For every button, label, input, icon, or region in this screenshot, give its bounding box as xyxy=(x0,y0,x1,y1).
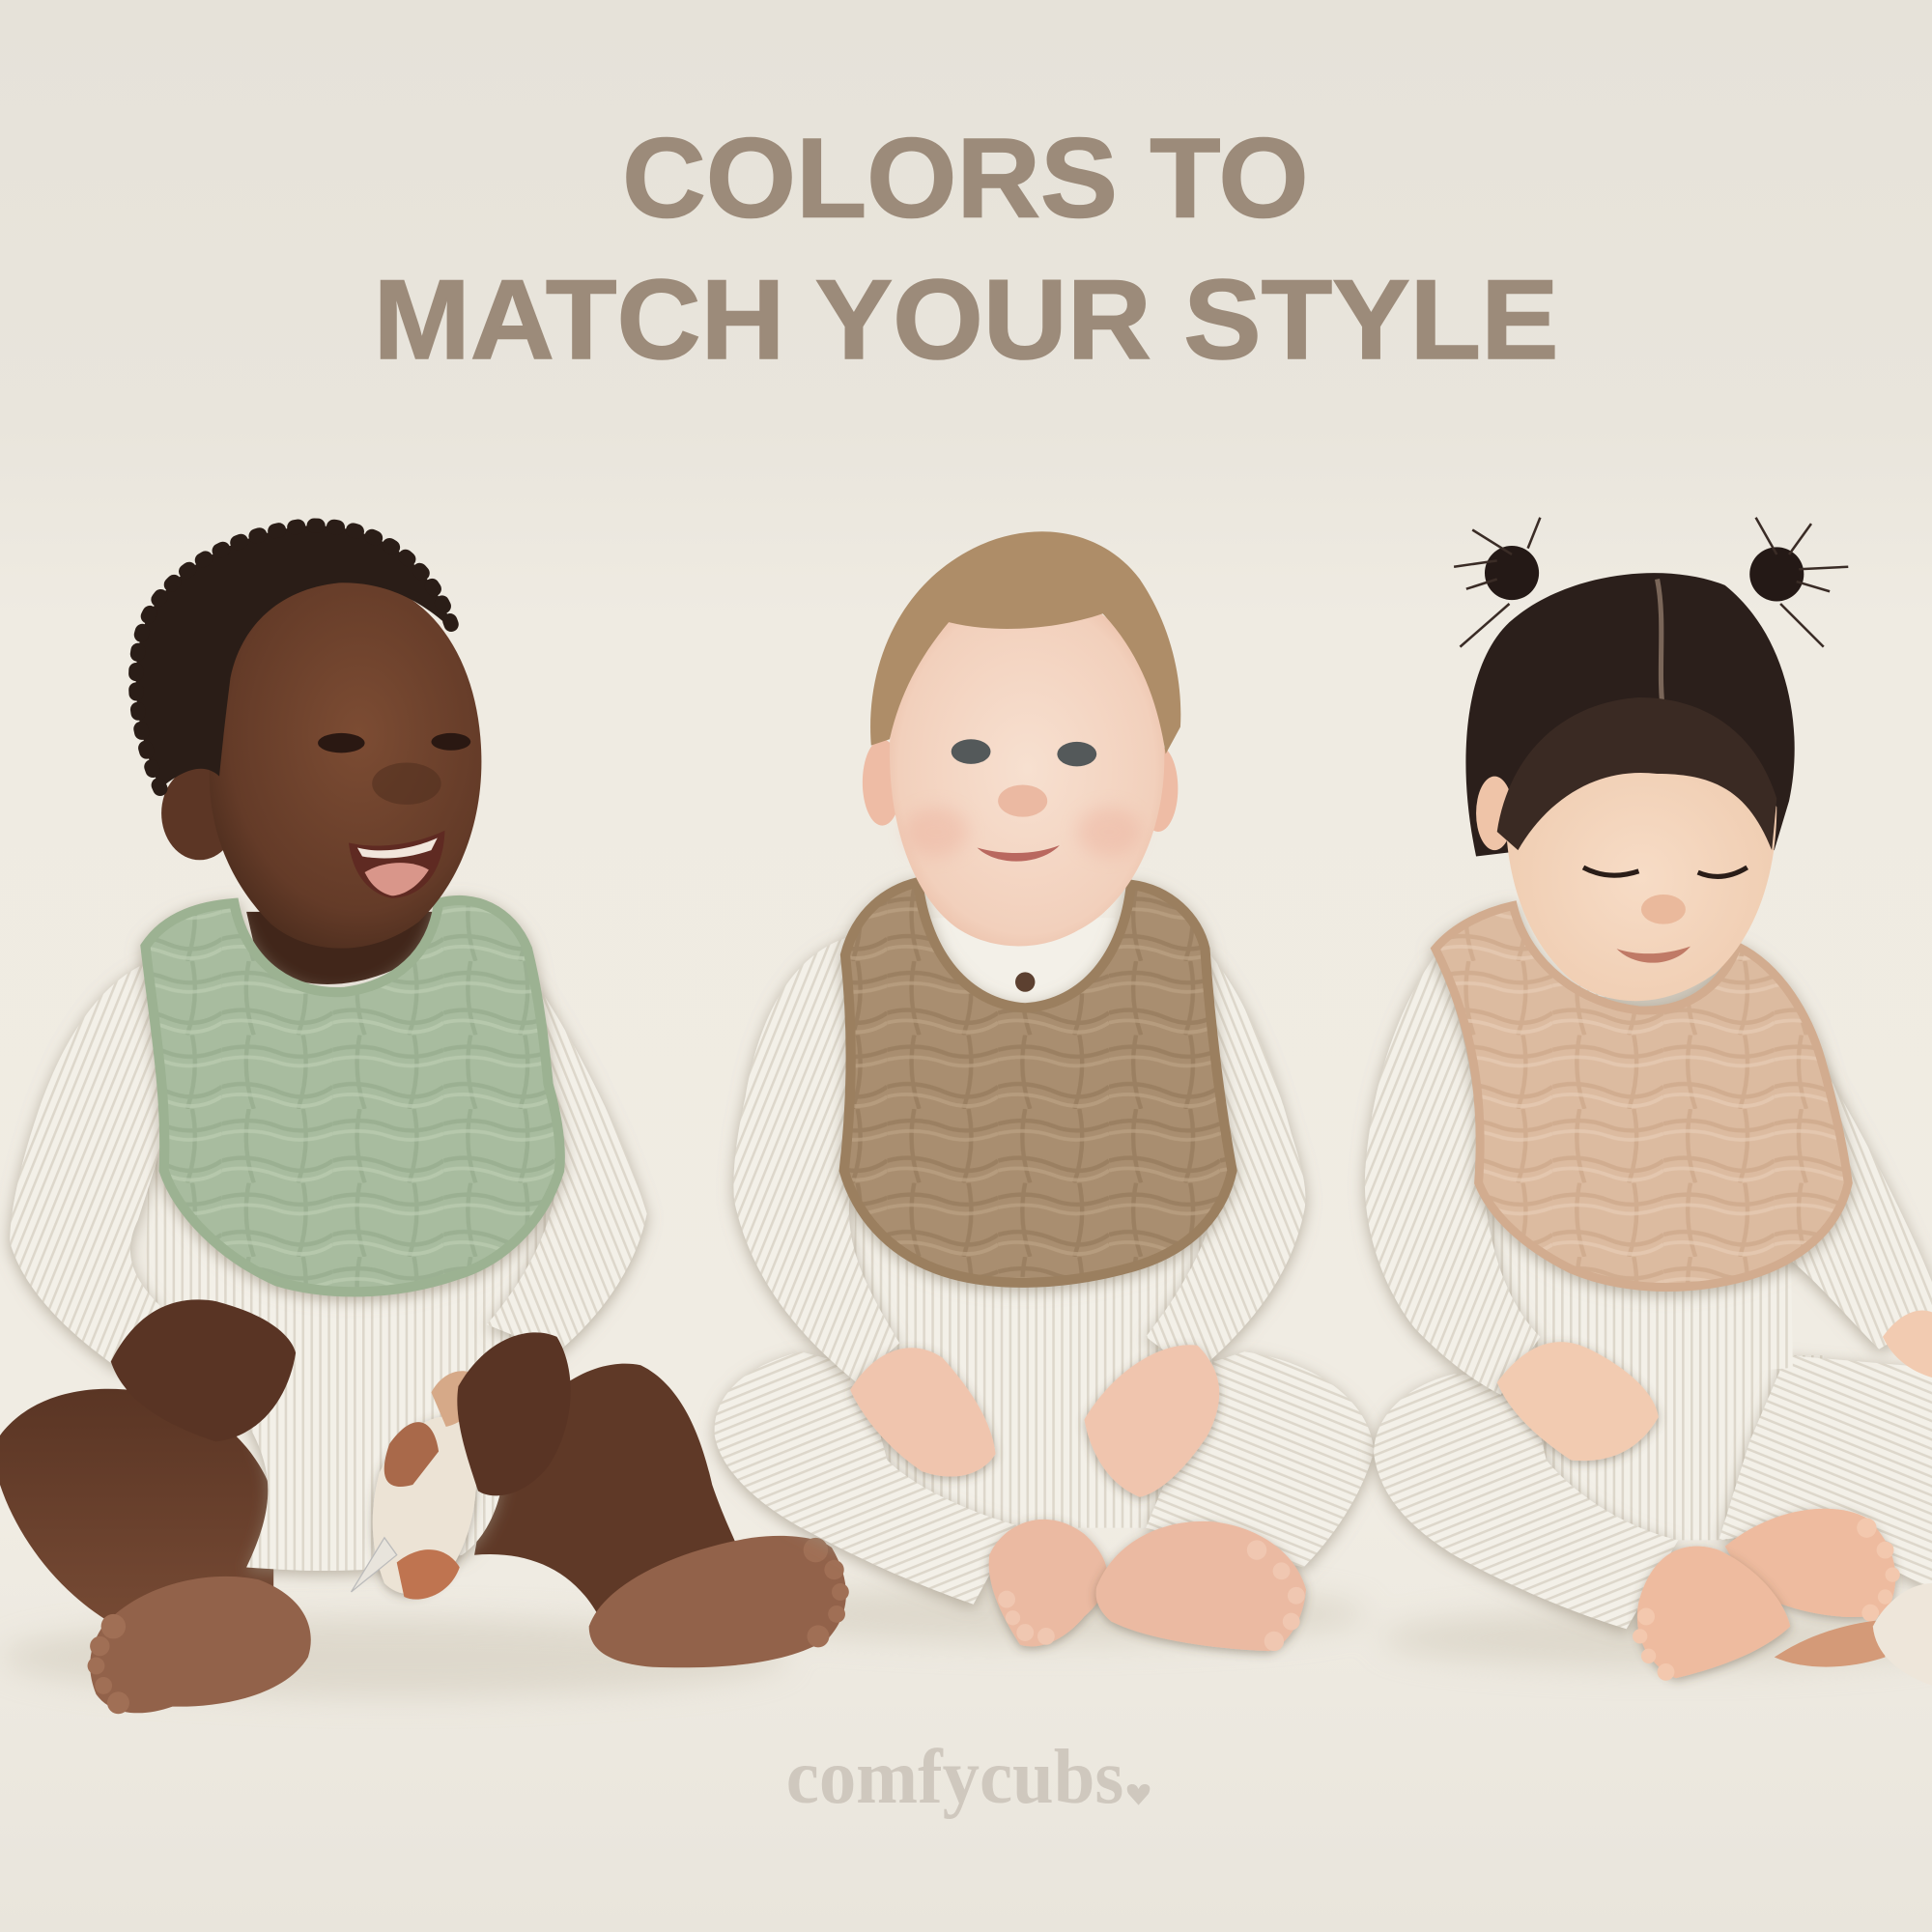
front foot xyxy=(1637,1547,1790,1678)
undershirt collar xyxy=(1528,955,1731,1018)
left foot toes xyxy=(998,1591,1055,1645)
title line 2: MATCH YOUR STYLE xyxy=(373,256,1559,383)
neck and collar xyxy=(930,918,1122,1013)
left ear xyxy=(863,739,902,826)
hair xyxy=(870,531,1180,754)
pelvis xyxy=(850,1355,1208,1528)
left hair bun xyxy=(1485,546,1539,600)
left cheek blush xyxy=(904,807,969,856)
toy wing xyxy=(1775,1620,1886,1667)
shadow under baby 2 xyxy=(727,1584,1368,1644)
back foot xyxy=(1725,1509,1895,1617)
toy rabbit xyxy=(352,1371,484,1600)
baby 1 with green bib xyxy=(0,526,849,1714)
hair parting xyxy=(1658,579,1663,715)
right hand xyxy=(457,1332,571,1495)
green bib xyxy=(146,900,560,1292)
left eye xyxy=(952,739,991,764)
left arm xyxy=(733,936,899,1382)
right cheek blush xyxy=(1077,807,1141,856)
brand logo xyxy=(786,1734,1150,1820)
toy body xyxy=(373,1416,476,1594)
mouth xyxy=(1616,947,1690,963)
left arm xyxy=(10,958,173,1370)
right foot toes xyxy=(804,1538,849,1647)
head xyxy=(890,591,1164,946)
right hand xyxy=(1084,1345,1219,1497)
left foot xyxy=(989,1520,1107,1646)
right eye xyxy=(1057,742,1096,766)
right ear xyxy=(1139,746,1178,832)
mouth xyxy=(977,845,1060,862)
toy foot xyxy=(397,1549,460,1600)
onesie bottom xyxy=(244,1392,505,1571)
back foot toes xyxy=(1857,1518,1900,1622)
left leg xyxy=(0,1389,273,1627)
right eye xyxy=(1698,867,1747,877)
right foot toes xyxy=(1247,1540,1305,1651)
left eye xyxy=(318,733,365,753)
toy ear xyxy=(431,1371,484,1427)
left ear xyxy=(1476,777,1513,850)
nose xyxy=(372,763,441,805)
shadow under baby 1 xyxy=(0,1618,788,1696)
peach bib xyxy=(1435,906,1848,1288)
left eye xyxy=(1583,867,1638,875)
right foot xyxy=(1096,1521,1306,1651)
button xyxy=(1015,972,1035,992)
left leg xyxy=(715,1351,1016,1605)
ear xyxy=(161,766,238,860)
head xyxy=(210,579,481,949)
nose xyxy=(1641,895,1686,924)
brown bib xyxy=(844,882,1233,1283)
hair tufts xyxy=(1454,518,1848,647)
wordmark: comfycubs xyxy=(786,1734,1123,1820)
right hand xyxy=(1883,1311,1932,1378)
title xyxy=(373,114,1559,383)
undershirt collar xyxy=(246,949,431,1015)
tongue xyxy=(365,863,429,895)
floor shadows xyxy=(0,1584,1932,1696)
neck xyxy=(246,912,438,992)
toy tag xyxy=(352,1538,397,1592)
left foot xyxy=(90,1577,311,1713)
right hair bun xyxy=(1749,547,1804,601)
toy at right edge xyxy=(1775,1583,1932,1686)
nose xyxy=(998,784,1047,817)
hair xyxy=(136,526,453,788)
torso xyxy=(146,985,560,1419)
right leg xyxy=(1146,1351,1374,1567)
curly hair fringe xyxy=(136,526,453,788)
toy body xyxy=(1873,1583,1932,1686)
left leg xyxy=(1374,1374,1678,1629)
upper teeth xyxy=(357,838,438,859)
shadow under baby 3 xyxy=(1380,1609,1932,1668)
right arm xyxy=(1786,1047,1932,1350)
torso xyxy=(850,974,1213,1380)
icon: heart xyxy=(1127,1784,1150,1805)
left hand xyxy=(850,1348,996,1477)
left foot toes xyxy=(88,1614,129,1714)
baby 3 with peach bib xyxy=(1365,518,1932,1686)
title line 1: COLORS TO xyxy=(622,114,1309,241)
right leg xyxy=(1719,1355,1932,1589)
left arm xyxy=(1365,955,1540,1395)
fringe xyxy=(1497,697,1776,850)
front foot toes xyxy=(1633,1608,1674,1681)
right arm xyxy=(487,974,647,1353)
right foot xyxy=(589,1536,846,1667)
head xyxy=(1506,727,1776,1001)
pelvis xyxy=(1479,1355,1824,1540)
hair back xyxy=(1465,573,1795,856)
baby 2 with brown bib xyxy=(715,531,1374,1651)
right leg xyxy=(474,1364,739,1627)
right eye xyxy=(431,733,470,751)
left hand xyxy=(111,1299,296,1441)
torso xyxy=(1479,985,1793,1392)
toy patch xyxy=(384,1422,439,1487)
left hand xyxy=(1497,1342,1659,1461)
open mouth xyxy=(349,831,444,898)
right arm xyxy=(1146,949,1305,1374)
